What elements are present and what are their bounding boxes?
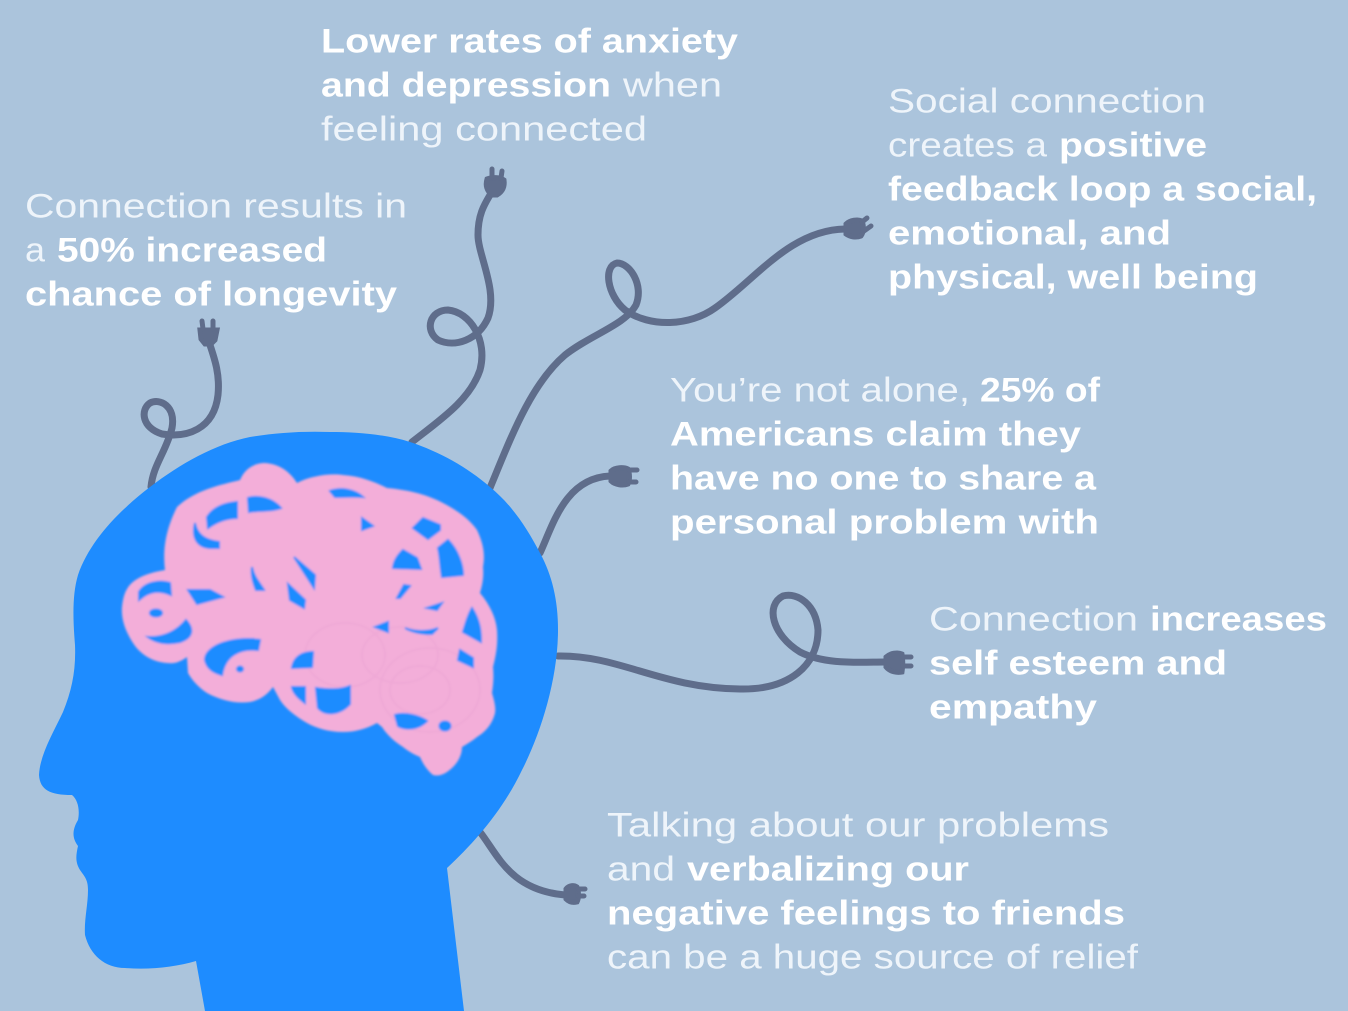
text: positive feedback loop: physical, well being — [888, 258, 1258, 296]
text: positive feedback loop: positive — [1059, 126, 1207, 164]
text: longevity: chance of longevity — [25, 275, 397, 313]
brain — [122, 463, 497, 776]
icon: plug verbalizing — [566, 886, 585, 902]
text: longevity: a — [25, 231, 45, 269]
cord: anxiety and depression — [412, 169, 504, 442]
text: verbalizing: negative feelings to friends — [607, 894, 1125, 932]
brain scribble lines — [305, 623, 480, 732]
text: not alone: 25% of — [980, 371, 1101, 409]
text: positive feedback loop: feedback loop a social, — [888, 170, 1317, 208]
text: not alone: personal problem with — [670, 503, 1099, 541]
text: not alone: have no one to share a — [670, 459, 1097, 497]
icon: plug self esteem — [886, 653, 911, 672]
icon: plug longevity — [200, 321, 217, 344]
text: verbalizing — [607, 806, 1139, 976]
head silhouette — [39, 432, 558, 1011]
text: verbalizing: and — [607, 850, 675, 888]
cord: positive feedback loop — [490, 218, 871, 488]
text: not alone: Americans claim they — [670, 415, 1081, 453]
icon: plug anxiety — [486, 169, 504, 195]
text: self esteem: empathy — [929, 688, 1097, 726]
brain mass — [122, 463, 497, 776]
text: anxiety and depression: and depression — [321, 66, 611, 104]
icon: plug not alone — [611, 468, 637, 485]
icon: plug feedback — [846, 218, 871, 237]
text: verbalizing: can be a huge source of relief — [607, 938, 1139, 976]
text: longevity: Connection results in — [25, 187, 407, 225]
text: verbalizing: Talking about our problems — [607, 806, 1109, 844]
text: positive feedback loop — [888, 82, 1317, 296]
cord: longevity — [144, 321, 218, 487]
text: anxiety and depression — [321, 22, 738, 148]
brain gaps — [139, 489, 481, 730]
text: self esteem: Connection — [929, 600, 1138, 638]
text: self esteem: increases — [1150, 600, 1327, 638]
text: not alone — [670, 371, 1101, 541]
text: positive feedback loop: emotional, and — [888, 214, 1171, 252]
text: anxiety and depression: when — [622, 66, 722, 104]
text: self esteem — [929, 600, 1327, 726]
text: self esteem: self esteem and — [929, 644, 1227, 682]
text: positive feedback loop: Social connection — [888, 82, 1206, 120]
text: positive feedback loop: creates a — [888, 126, 1047, 164]
text: anxiety and depression: Lower rates of anxiety — [321, 22, 738, 60]
cord: not alone — [540, 468, 637, 553]
cord: verbalizing — [480, 832, 585, 902]
text: longevity: 50% increased — [57, 231, 327, 269]
text: longevity — [25, 187, 407, 313]
text: verbalizing: verbalizing our — [687, 850, 969, 888]
text: not alone: You’re not alone, — [670, 371, 970, 409]
text: anxiety and depression: feeling connected — [321, 110, 647, 148]
cord: self esteem — [558, 595, 911, 689]
